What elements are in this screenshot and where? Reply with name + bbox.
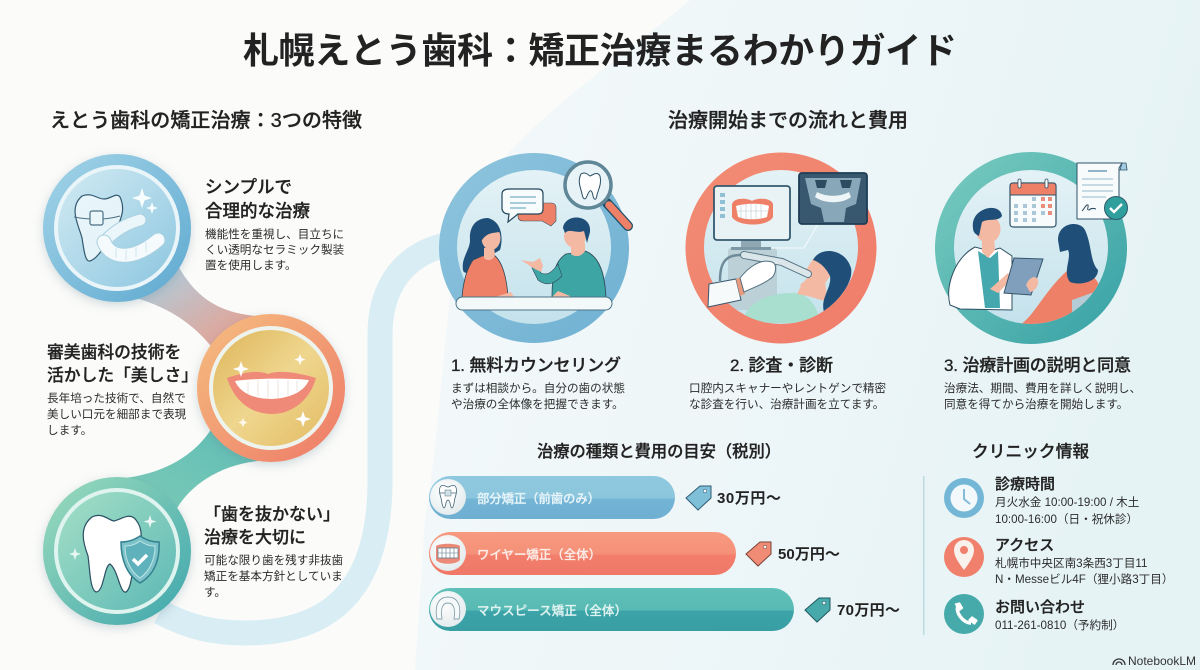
feature 2 heading: 活かした「美しさ」 xyxy=(47,366,198,385)
panel: step 2 xyxy=(429,152,1196,668)
step 1 body: や治療の全体像を把握できます。 xyxy=(451,397,624,411)
icon: monitor with dentures xyxy=(714,186,790,250)
hours: 診療時間 xyxy=(995,476,1055,493)
panel: feature 2 xyxy=(47,314,345,462)
feature 2 body: します。 xyxy=(47,424,92,437)
illustration: treatment plan explanation xyxy=(935,152,1127,344)
heading: features: えとう歯科の矯正治療：3つの特徴 xyxy=(50,109,362,132)
bar: partial braces xyxy=(429,476,675,519)
feature 3 body: 矯正を基本方針としていま xyxy=(204,569,343,583)
bar: aligner xyxy=(429,588,794,631)
hours xyxy=(995,476,1139,526)
step 3 title: 3. 治療計画の説明と同意 xyxy=(944,356,1131,375)
icon: tooth with bracket and aligner xyxy=(43,154,191,302)
bar: wire braces xyxy=(429,532,736,575)
connector: blue to coral xyxy=(136,266,256,350)
price tag: 700,000 yen: 70万円〜 xyxy=(837,602,900,619)
title: 札幌えとう歯科：矯正治療まるわかりガイド xyxy=(243,30,957,71)
feature 2 body: 長年培った技術で、自然で xyxy=(47,391,186,405)
step 1 body: まずは相談から。自分の歯の状態 xyxy=(451,381,625,395)
panel: step 3 xyxy=(935,152,1141,411)
feature 2 body: 美しい口元を細部まで表現 xyxy=(47,407,187,421)
feature 1 heading: シンプルで xyxy=(205,177,292,197)
price tag: 300,000 yen xyxy=(686,486,781,510)
feature 3 body: 可能な限り歯を残す非抜歯 xyxy=(204,553,344,567)
access: 札幌市中央区南3条西3丁目11 xyxy=(995,556,1147,570)
feature 1 body: 機能性を重視し、目立ちに xyxy=(205,227,344,241)
bar chart: treatment cost xyxy=(429,476,900,631)
feature 2 heading: 審美歯科の技術を xyxy=(47,343,181,362)
feature 1 body: くい透明なセラミック製装 xyxy=(205,242,345,256)
step 2 title: 2. 診査・診断 xyxy=(730,356,833,375)
bar: wire braces: ワイヤー矯正（全体） xyxy=(477,547,601,562)
icon: speech bubbles xyxy=(502,189,556,226)
feature 1 heading: 合理的な治療 xyxy=(205,201,310,221)
icon: magnifier with tooth xyxy=(565,162,628,226)
hours: 月火水金 10:00-19:00 / 木土 xyxy=(995,496,1139,509)
bar: aligner: マウスピース矯正（全体） xyxy=(477,603,627,618)
feature 3 heading: 「歯を抜かない」 xyxy=(204,505,340,524)
heading: clinic info: クリニック情報 xyxy=(972,442,1089,461)
icon: phone xyxy=(944,594,984,634)
price tag: 300,000 yen: 30万円〜 xyxy=(717,490,781,507)
bar: partial braces: 部分矯正（前歯のみ） xyxy=(477,491,600,506)
panel: feature 1 xyxy=(43,154,345,302)
feature 1 body: 置を使用します。 xyxy=(205,258,297,272)
watermark: NotebookLM: NotebookLM xyxy=(1128,654,1196,668)
price tag: 700,000 yen xyxy=(805,598,900,622)
icon: x-ray panel xyxy=(799,173,867,224)
price tag: 500,000 yen xyxy=(746,542,840,566)
icon: clock xyxy=(944,478,984,518)
connector: coral to teal xyxy=(125,428,258,510)
step 2 body: 口腔内スキャナーやレントゲンで精密 xyxy=(689,381,887,395)
contact: 011-261-0810（予約制） xyxy=(995,618,1124,632)
step 3 body: 治療法、期間、費用を詳しく説明し、 xyxy=(944,381,1141,395)
icon: tooth with shield xyxy=(43,477,191,625)
hours: 10:00-16:00（日・祝休診） xyxy=(995,512,1138,526)
illustration: counseling xyxy=(439,153,629,343)
icon: map pin xyxy=(944,537,984,577)
heading: flow and cost: 治療開始までの流れと費用 xyxy=(668,109,908,132)
feature 3 heading: 治療を大切に xyxy=(204,528,306,547)
icon: golden smile xyxy=(197,314,345,462)
access: アクセス xyxy=(995,537,1054,554)
access xyxy=(995,537,1173,586)
icon: gloved hand with scanner xyxy=(708,255,808,307)
step 2 body: な診査を行い、治療計画を立てます。 xyxy=(689,397,884,411)
panel: step 1 xyxy=(439,153,629,411)
price tag: 500,000 yen: 50万円〜 xyxy=(778,546,840,563)
ribbon: light blue path linking features to flow xyxy=(160,245,445,633)
icon: signed document with check xyxy=(1077,163,1128,220)
panel: feature 3 xyxy=(43,477,344,625)
contact xyxy=(995,599,1124,632)
contact: お問い合わせ xyxy=(995,599,1085,616)
panel: clinic info xyxy=(944,476,1173,634)
icon: calendar xyxy=(1010,179,1056,227)
step 3 body: 同意を得てから治療を開始します。 xyxy=(944,397,1128,411)
heading: treatment cost: 治療の種類と費用の目安（税別） xyxy=(537,443,781,461)
illustration: intraoral scan xyxy=(686,152,887,411)
feature 3 body: す。 xyxy=(204,586,226,599)
step 1 title: 1. 無料カウンセリング xyxy=(451,356,621,375)
access: N・Messeビル4F（狸小路3丁目） xyxy=(995,572,1173,586)
